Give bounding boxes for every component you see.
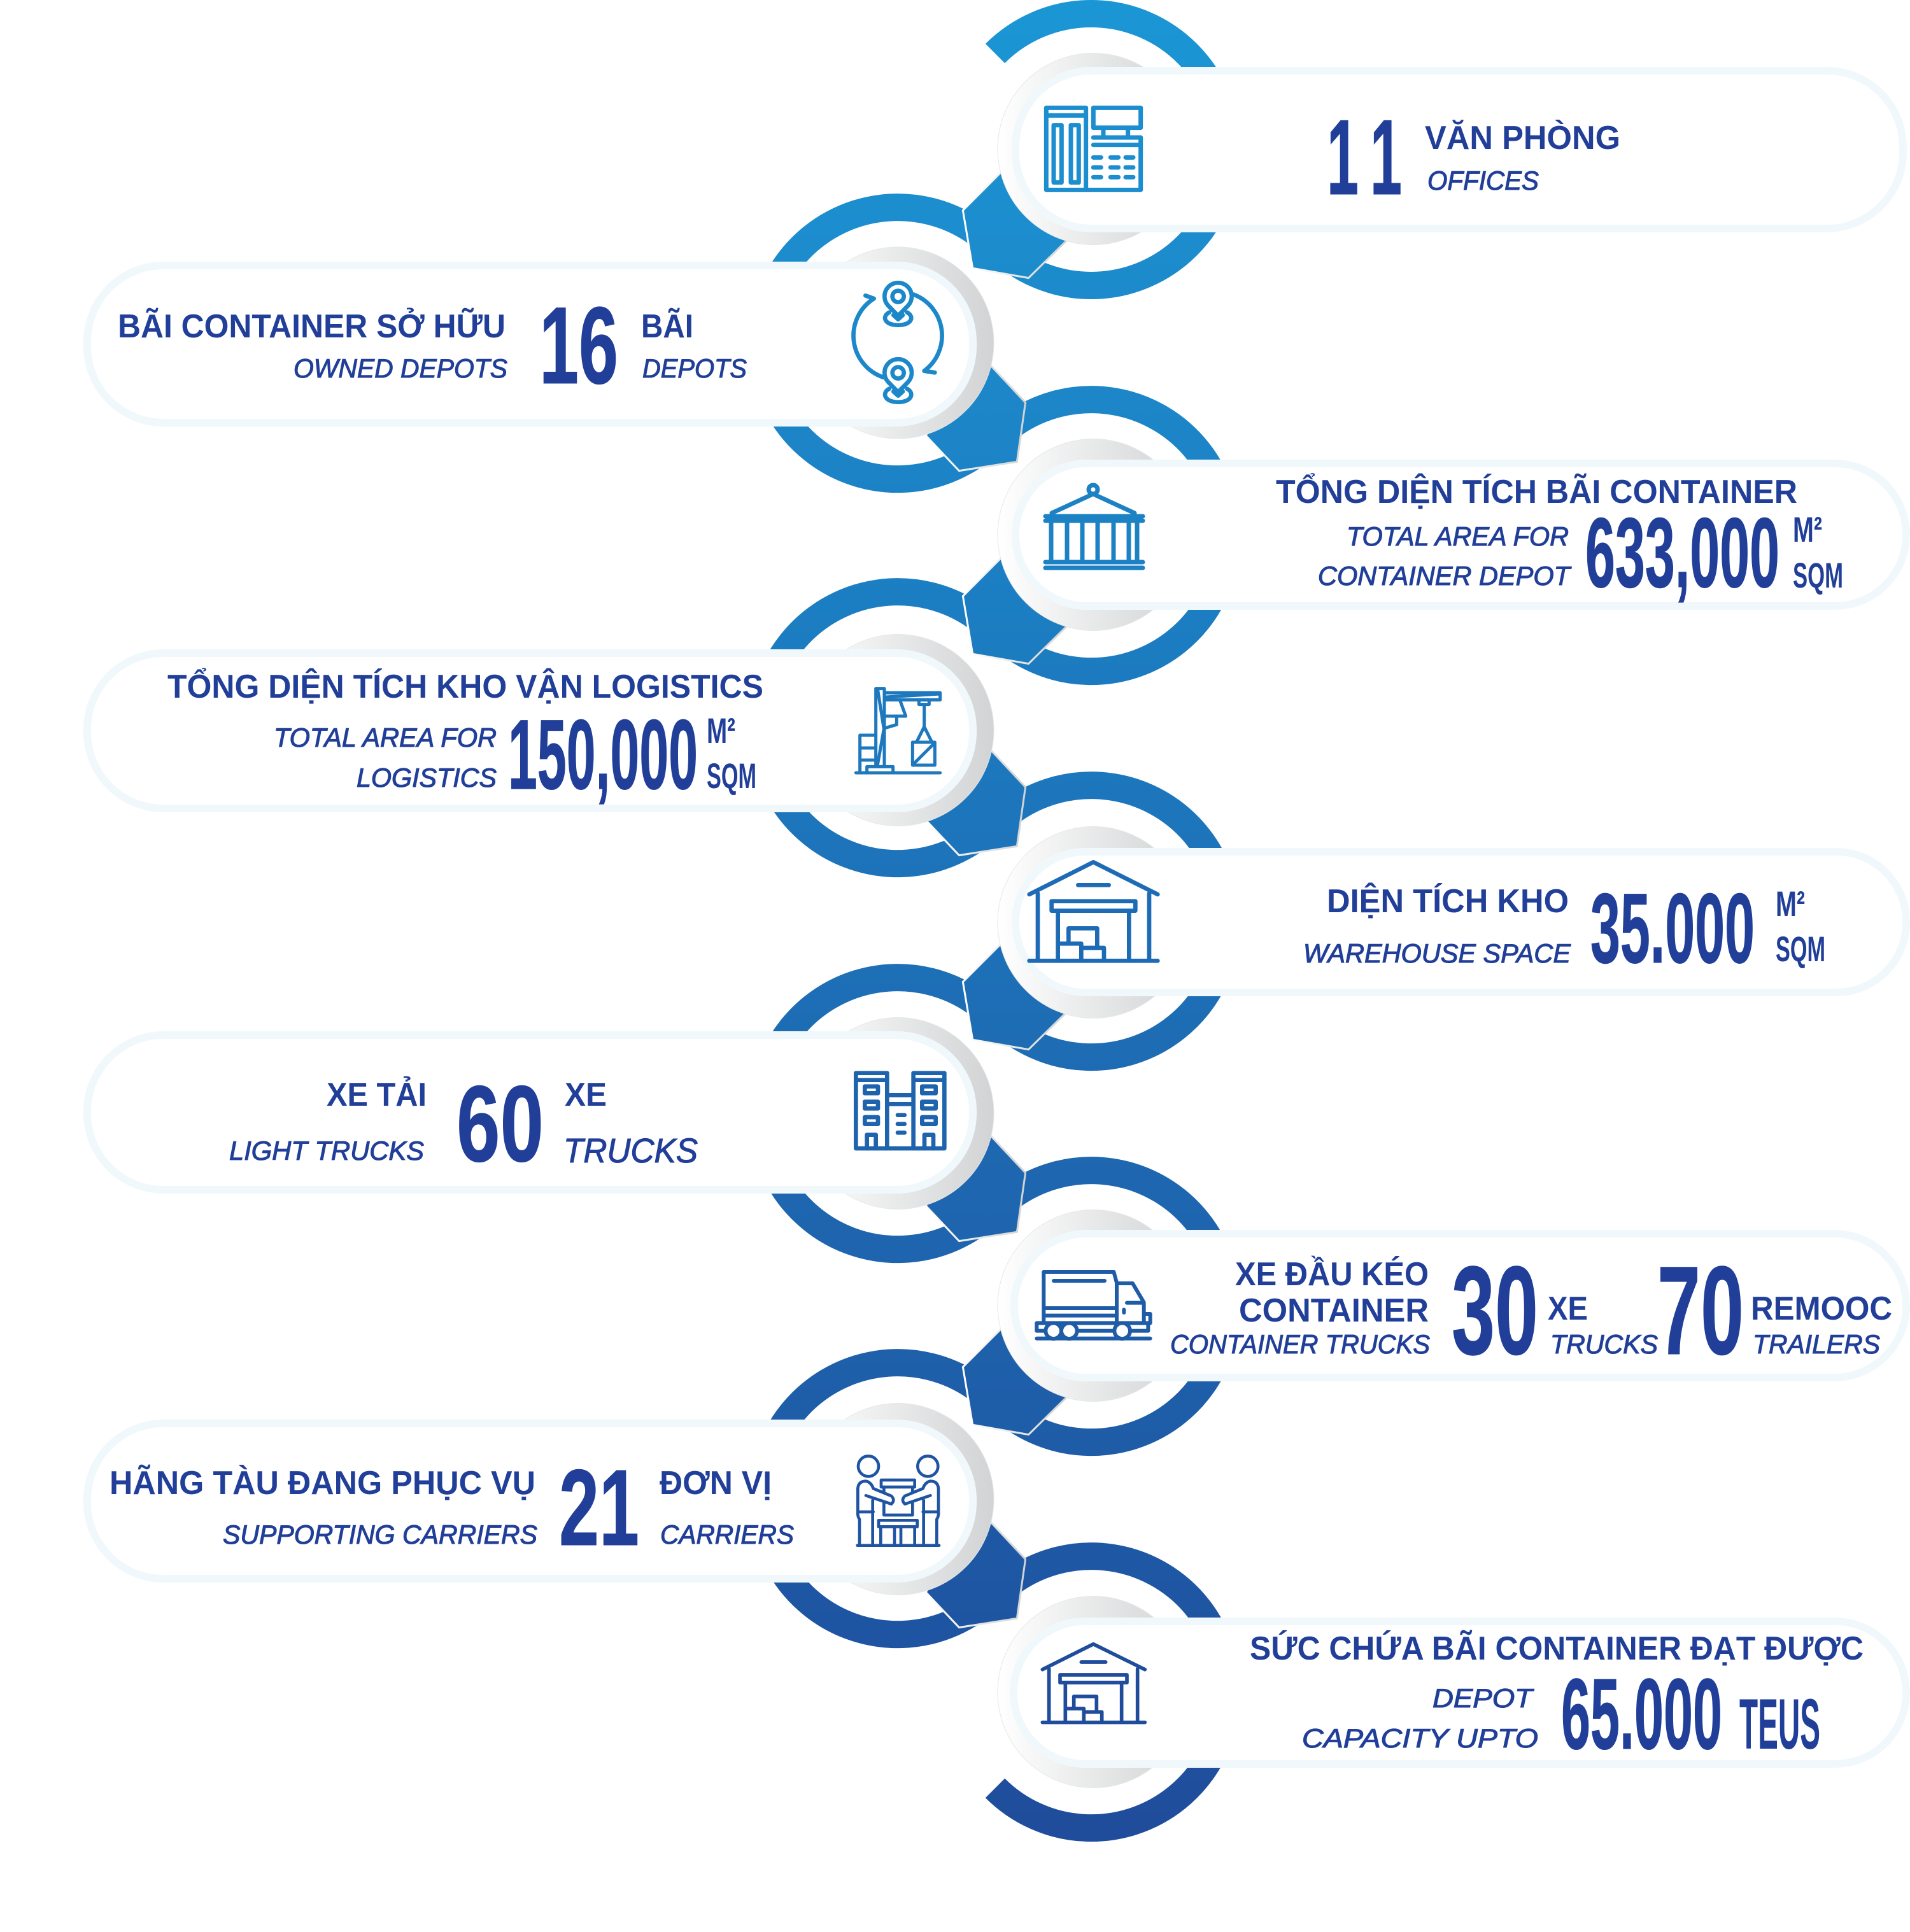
icon: warehouse small	[1042, 1644, 1145, 1723]
icon: location pins cycle	[854, 283, 942, 402]
panel: offices	[998, 53, 1903, 244]
unit: m2: M²	[1793, 509, 1822, 549]
heading line 2: CONTAINER	[1239, 1292, 1429, 1329]
number: 21: 21	[559, 1448, 639, 1569]
connector 7	[964, 1321, 1065, 1434]
unit: trucks: TRUCKS	[1550, 1329, 1658, 1359]
connector 3	[964, 550, 1065, 663]
blue chain rings	[761, 13, 1227, 1828]
label: van phong: VĂN PHÒNG	[1425, 120, 1620, 157]
connector 8	[927, 1512, 1024, 1626]
unit: sqm: SQM	[1793, 555, 1843, 595]
number: 150,000: 150,000	[508, 700, 698, 810]
panel: total logistics area	[87, 634, 994, 826]
unit: carriers: CARRIERS	[660, 1520, 794, 1549]
ring 3	[995, 400, 1227, 672]
ring 8	[761, 1363, 994, 1635]
label line 1: TOTAL AREA FOR	[274, 723, 497, 752]
label: owned depots: OWNED DEPOTS	[294, 353, 507, 383]
unit: sqm: SQM	[1776, 929, 1825, 969]
label: CONTAINER TRUCKS	[1170, 1329, 1430, 1359]
number: 11: 1	[1327, 97, 1359, 217]
heading line 1: XE ĐẦU KÉO	[1235, 1255, 1429, 1293]
ring 1	[995, 13, 1227, 286]
label line 2: LOGISTICS	[357, 763, 497, 793]
label line 1: DEPOT	[1432, 1683, 1535, 1713]
ring 7	[995, 1171, 1227, 1442]
heading: DIỆN TÍCH KHO	[1327, 882, 1569, 920]
label: light trucks: LIGHT TRUCKS	[229, 1136, 424, 1166]
unit: m2: M²	[1776, 884, 1805, 924]
label: offices: OFFICES	[1427, 166, 1539, 195]
pentagon connectors	[927, 164, 1065, 1626]
panel: total container depot area	[998, 439, 1906, 630]
ring 9	[995, 1556, 1227, 1828]
ring 4	[761, 592, 994, 864]
number: 60: 60	[456, 1064, 544, 1185]
label line 1: TOTAL AREA FOR	[1347, 521, 1569, 551]
number: 35.000: 35.000	[1590, 873, 1755, 984]
icon: crane	[856, 689, 940, 773]
panel: light trucks	[87, 1017, 994, 1209]
unit: don vi: ĐƠN VỊ	[660, 1465, 772, 1502]
icon: warehouse	[1029, 862, 1157, 961]
unit: depots: DEPOTS	[642, 353, 747, 383]
icon: truck	[1036, 1272, 1150, 1339]
ring 2	[761, 208, 994, 479]
icon: people and box	[858, 1456, 939, 1546]
ring 6	[761, 978, 994, 1250]
unit: m2: M²	[707, 710, 735, 751]
panel: depot capacity	[998, 1597, 1906, 1787]
unit: trucks: TRUCKS	[563, 1132, 698, 1170]
icon: office building	[1046, 108, 1141, 190]
number: 65.000: 65.000	[1561, 1658, 1722, 1770]
number: 70: 70	[1657, 1240, 1744, 1381]
number: 16: 16	[539, 285, 618, 407]
connector 6	[927, 1126, 1024, 1240]
icon: buildings	[856, 1073, 944, 1148]
heading: SỨC CHỨA BÃI CONTAINER ĐẠT ĐƯỢC	[1250, 1630, 1864, 1667]
unit: xe: XE	[1548, 1290, 1588, 1327]
label line 2: CAPACITY UPTO	[1302, 1723, 1538, 1753]
icon: container	[1045, 485, 1143, 568]
unit: remooc: REMOOC	[1751, 1290, 1892, 1327]
number: 11: 1	[1370, 97, 1402, 217]
connector 1	[964, 164, 1065, 277]
connector 5	[964, 936, 1065, 1048]
heading: TỔNG DIỆN TÍCH BÃI CONTAINER	[1276, 473, 1797, 511]
label: xe tai: XE TẢI	[327, 1076, 427, 1113]
label: bai container so huu: BÃI CONTAINER SỞ HỮU	[118, 307, 506, 345]
connector 4	[927, 740, 1024, 854]
label: supporting carriers: SUPPORTING CARRIERS	[223, 1520, 537, 1549]
unit: bai: BÃI	[641, 307, 693, 345]
ring 5	[995, 786, 1227, 1057]
panel: owned depots	[87, 247, 994, 439]
label line 2: CONTAINER DEPOT	[1318, 561, 1572, 591]
label: WAREHOUSE SPACE	[1303, 938, 1571, 968]
connector 2	[927, 356, 1024, 470]
number: 30: 30	[1452, 1240, 1538, 1381]
panel: warehouse space	[998, 826, 1906, 1019]
unit: trailers: TRAILERS	[1753, 1329, 1880, 1359]
panel: container trucks	[998, 1209, 1906, 1402]
heading: TỔNG DIỆN TÍCH KHO VẬN LOGISTICS	[167, 668, 763, 705]
unit: xe: XE	[565, 1076, 607, 1113]
panel: supporting carriers	[87, 1403, 994, 1595]
label: hang tau: HÃNG TÀU ĐANG PHỤC VỤ	[110, 1464, 535, 1502]
unit: sqm: SQM	[707, 756, 756, 796]
